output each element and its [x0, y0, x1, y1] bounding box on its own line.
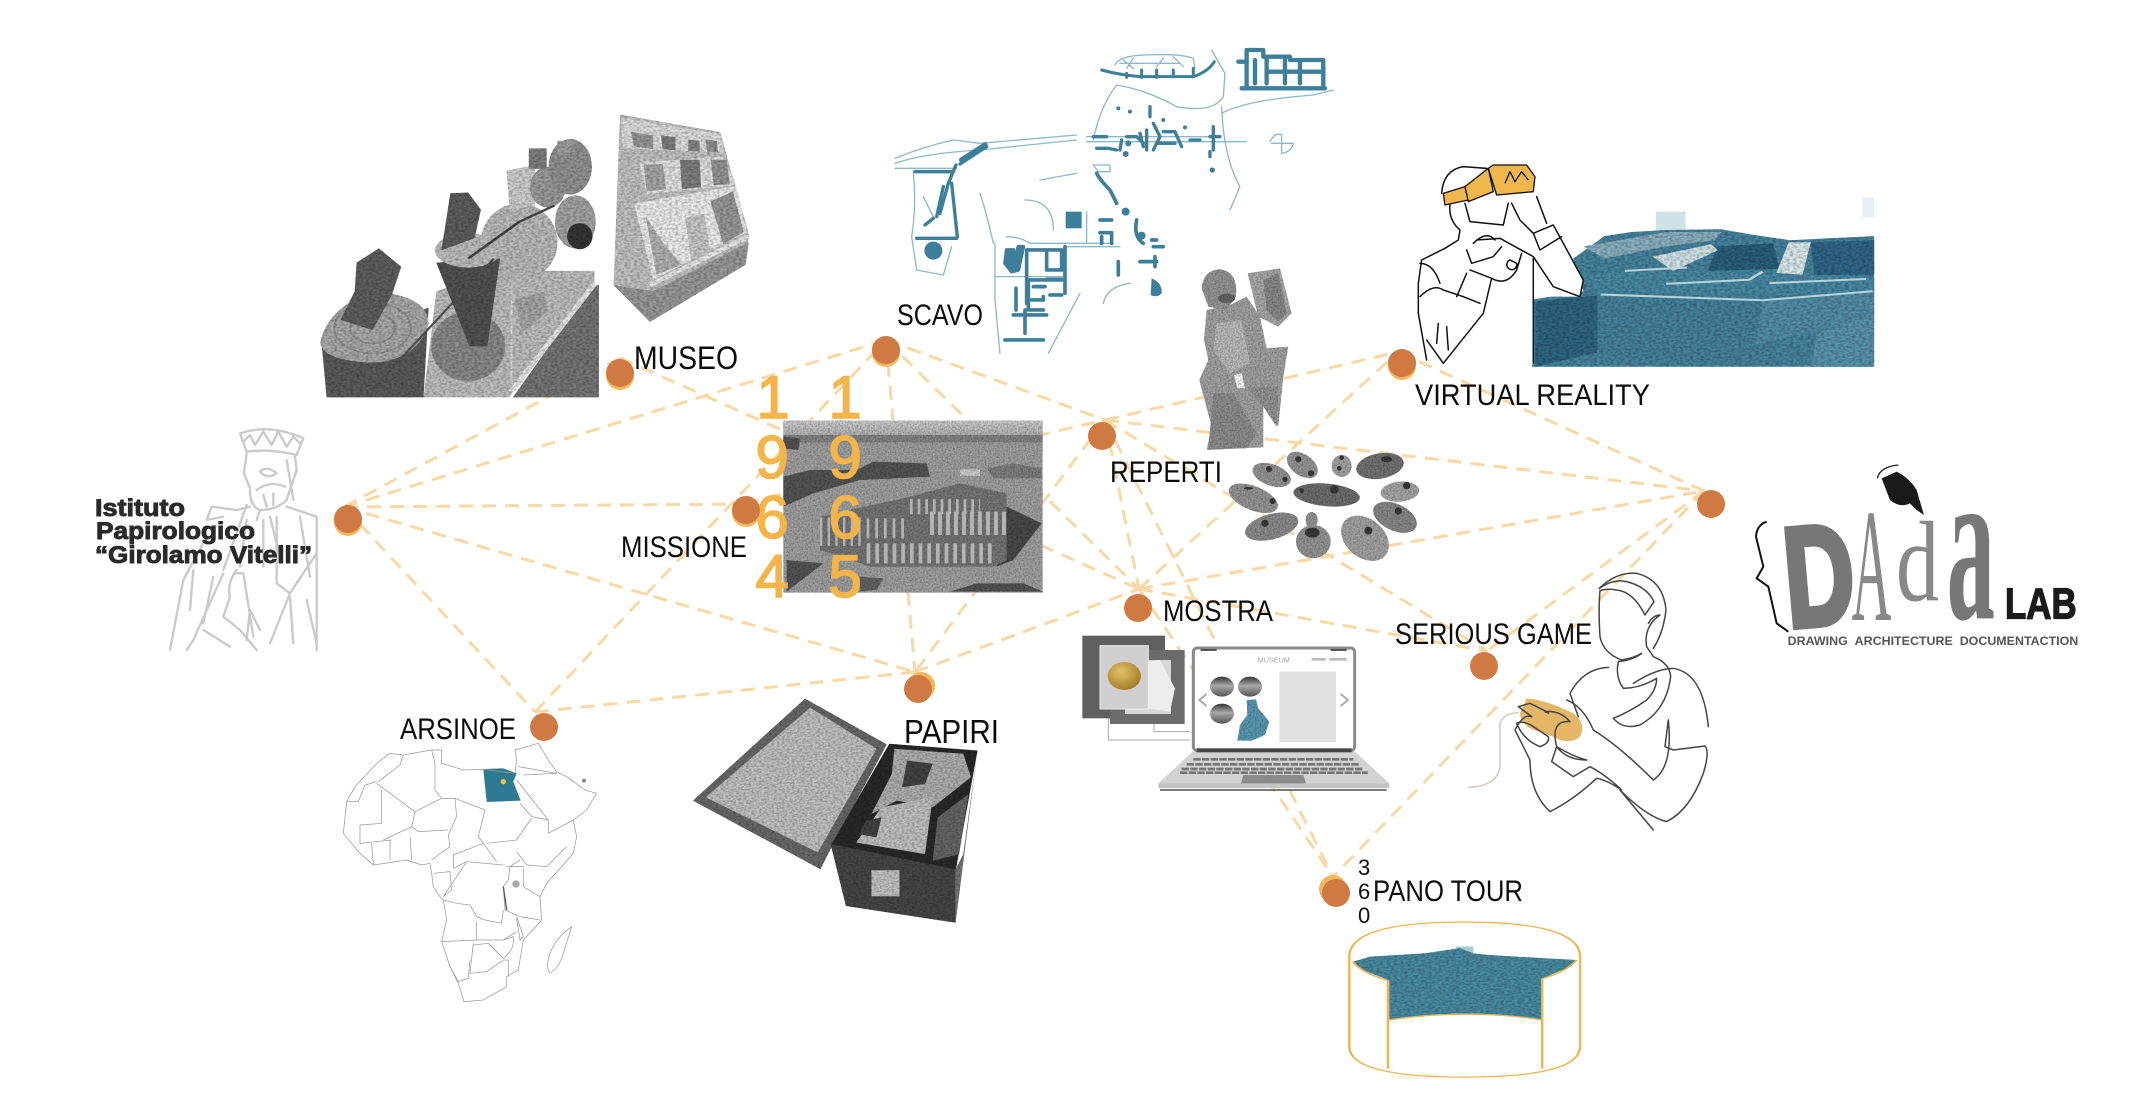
DADA letters	[1777, 421, 1995, 668]
label: stacked 360: 3	[1358, 855, 1370, 880]
panel: Istituto Papirologico logo	[95, 429, 317, 650]
figure of Girolamo Vitelli	[170, 429, 317, 650]
node dot: Pano Tour	[1319, 875, 1350, 907]
institute name text: Papirologico	[96, 518, 255, 545]
screen content: MUSEUM	[1258, 658, 1290, 665]
central temple complex	[1093, 106, 1220, 173]
screen content	[1199, 658, 1348, 742]
1965 yellow date	[828, 364, 862, 610]
top right temple plan	[1238, 50, 1325, 88]
panel: terracotta statue	[1199, 268, 1292, 450]
game controller patch	[1520, 698, 1582, 741]
panel: box of papyri	[693, 699, 978, 923]
top ship-shaped plan	[1102, 55, 1214, 77]
1965 yellow date: 6	[828, 484, 862, 551]
label: Papiri: PAPIRI	[904, 713, 999, 750]
node dot: Scavo	[872, 336, 900, 367]
label: stacked 360: 0	[1358, 903, 1370, 928]
controller cable	[1468, 713, 1518, 787]
1965 yellow date: 1	[828, 364, 862, 431]
node dot: DADA LAB	[1697, 490, 1725, 518]
node dot: Serious Game	[1470, 652, 1498, 680]
panel: person playing serious game	[1468, 573, 1708, 830]
node dot: Reperti	[1088, 422, 1116, 450]
yellow VR headset	[1443, 165, 1535, 205]
1964 yellow date: 1	[756, 364, 790, 431]
panorama image in cylinder	[1353, 946, 1577, 1019]
institute name text: Istituto	[95, 495, 185, 522]
label: Museo: MUSEO	[634, 340, 738, 376]
pointing hand icon	[1877, 465, 1924, 515]
cylinder outline	[1349, 922, 1580, 1077]
label: Missione: MISSIONE	[621, 531, 747, 564]
1964 yellow date	[755, 364, 790, 610]
node dot: Arsinoe	[530, 713, 558, 741]
label: Scavo: SCAVO	[897, 299, 983, 332]
DADA letters: a	[1947, 421, 1995, 668]
panel: online museum exhibition on laptop	[1082, 636, 1389, 791]
node dot: Mostra	[1124, 594, 1152, 622]
1964 yellow date: 4	[755, 543, 789, 610]
DADA letters: d	[1896, 498, 1939, 626]
panel: person with VR headset	[1418, 165, 1583, 365]
left excavation block	[915, 145, 987, 258]
panel: museum pots and display case	[320, 114, 749, 397]
institute name text: “Girolamo Vitelli”	[95, 542, 312, 569]
shelf and pots photo	[320, 139, 599, 397]
connection network of dashed lines	[344, 340, 1704, 877]
panel: DADA LAB logo	[1756, 421, 2078, 668]
1964 yellow date: 9	[755, 424, 789, 491]
node dot: Virtual Reality	[1388, 349, 1416, 380]
tagline: DRAWING ARCHITECTURE DOCUMENTACTION	[1788, 634, 2078, 648]
1965 yellow date: 5	[828, 543, 862, 610]
panel: oil lamps	[1225, 446, 1422, 570]
node dot: Museo	[606, 359, 634, 390]
laptop body	[1158, 648, 1389, 791]
node dot: Papiri	[904, 672, 935, 703]
country borders	[343, 743, 597, 1002]
curly brace	[1756, 522, 1788, 632]
DADA letters: D	[1777, 493, 1861, 658]
label: Reperti: REPERTI	[1110, 456, 1222, 489]
line drawing of body	[1418, 167, 1583, 363]
LAB wordmark: LAB	[2005, 580, 2077, 628]
white body silhouette	[1418, 167, 1583, 365]
panel: teal ruin photo	[1532, 197, 1874, 367]
label: stacked 360	[1358, 855, 1370, 928]
label: Mostra: MOSTRA	[1163, 595, 1273, 628]
panel: 360 pano tour cylinder	[1349, 922, 1580, 1077]
label: Serious Game: SERIOUS GAME	[1395, 618, 1592, 651]
node dot: Istituto Papirologico	[334, 505, 362, 536]
node dot: Missione	[732, 496, 760, 527]
1964 yellow date: 6	[755, 484, 789, 551]
box with papyri fragments	[831, 744, 978, 923]
panel: excavation plan map	[895, 50, 1333, 353]
open lid	[693, 699, 887, 869]
bottom building complex	[1005, 173, 1163, 340]
label: Arsinoe: ARSINOE	[400, 713, 516, 746]
label: Virtual Reality: VIRTUAL REALITY	[1415, 379, 1650, 412]
panel: excavation crew photo 1964	[783, 421, 1043, 593]
institute name text	[95, 495, 312, 569]
stacked exhibition cards	[1082, 636, 1190, 740]
DADA letters: A	[1852, 477, 1891, 656]
Egypt highlighted	[483, 768, 521, 802]
label: stacked 360: 6	[1358, 879, 1370, 904]
1965 yellow date: 9	[828, 424, 862, 491]
display case with papyri	[614, 114, 749, 322]
river and site boundary lines	[895, 50, 1333, 353]
panel: map of Africa with Egypt highlighted	[343, 743, 597, 1002]
continuous line figure	[1515, 573, 1708, 830]
label: Pano Tour: PANO TOUR	[1373, 875, 1523, 908]
